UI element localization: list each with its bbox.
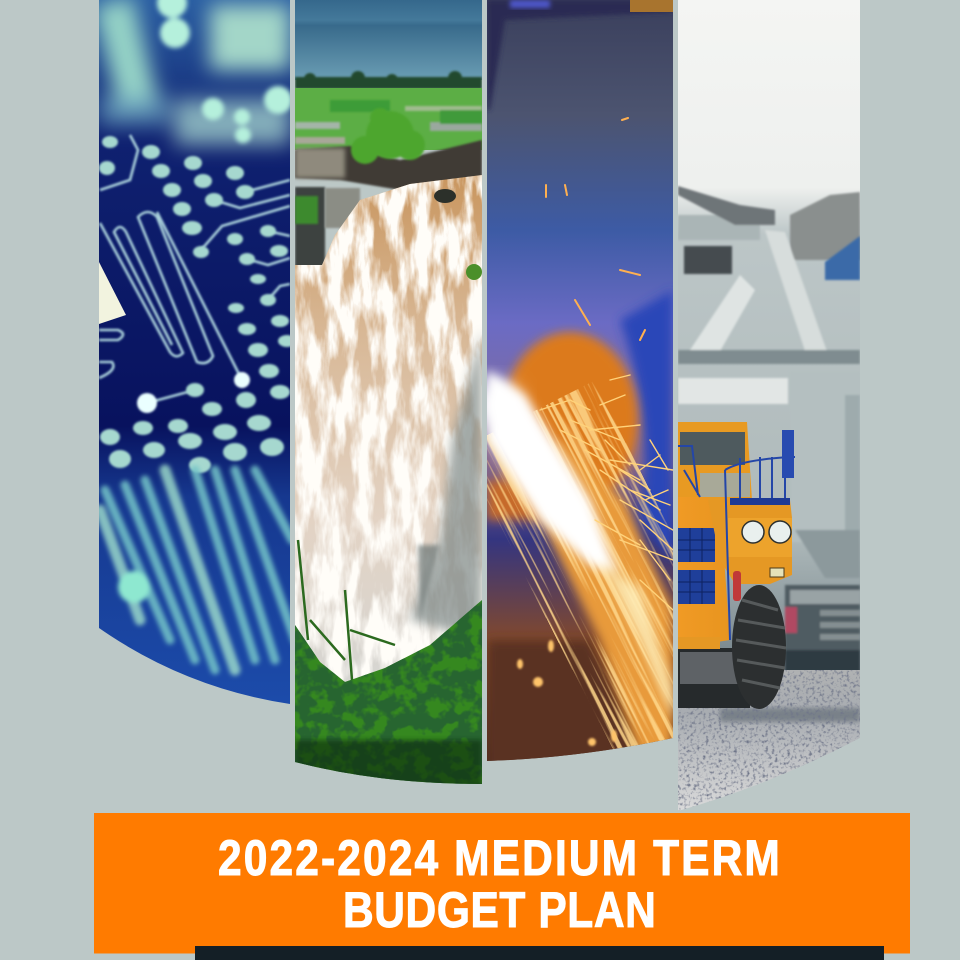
truck cab: [678, 422, 752, 500]
lower chassis: [678, 648, 750, 708]
sparks: [540, 118, 673, 610]
cliff: [295, 187, 325, 267]
grey shadow of falls: [410, 330, 482, 640]
sky and plant: [678, 0, 860, 670]
title: 2022-2024 MEDIUM TERM: [218, 830, 780, 886]
gravel heap: [790, 192, 860, 260]
traces: [99, 135, 290, 403]
tree line: [295, 71, 482, 89]
blue arc ring: [620, 290, 673, 560]
blurred lower traces: [100, 470, 295, 670]
plain: [295, 88, 482, 150]
bright junctions: [137, 393, 157, 413]
photo strip: mining truck: [678, 0, 860, 815]
water: [295, 175, 482, 705]
dark top band: [487, 0, 673, 110]
hanging sprigs: [298, 540, 395, 680]
rock at lip: [434, 189, 456, 203]
chip: [99, 262, 126, 324]
foreground foliage: [295, 595, 482, 790]
blue railing: [678, 446, 795, 640]
tyre: [732, 585, 786, 709]
dark footer box: [195, 946, 884, 960]
rocks: [295, 140, 482, 190]
pads: [99, 136, 296, 473]
ground: [678, 670, 860, 815]
title: BUDGET PLAN: [343, 882, 656, 938]
blurred top of circuit board: [93, 0, 290, 145]
front body: [708, 500, 792, 584]
crusher structure: [678, 186, 860, 672]
welding flare: [500, 440, 673, 760]
hood: [678, 497, 730, 648]
photo strip: waterfall: [295, 0, 482, 790]
photo strip: welding sparks: [487, 0, 673, 761]
sky: [295, 0, 482, 80]
photo strip: circuit board: [93, 0, 296, 710]
lower dark brown: [487, 640, 640, 770]
headlights: [742, 521, 764, 543]
orange disc: [502, 332, 638, 508]
title banner: [94, 813, 910, 954]
title: [218, 830, 780, 938]
bush: [351, 108, 425, 164]
extinguisher: [733, 571, 741, 601]
